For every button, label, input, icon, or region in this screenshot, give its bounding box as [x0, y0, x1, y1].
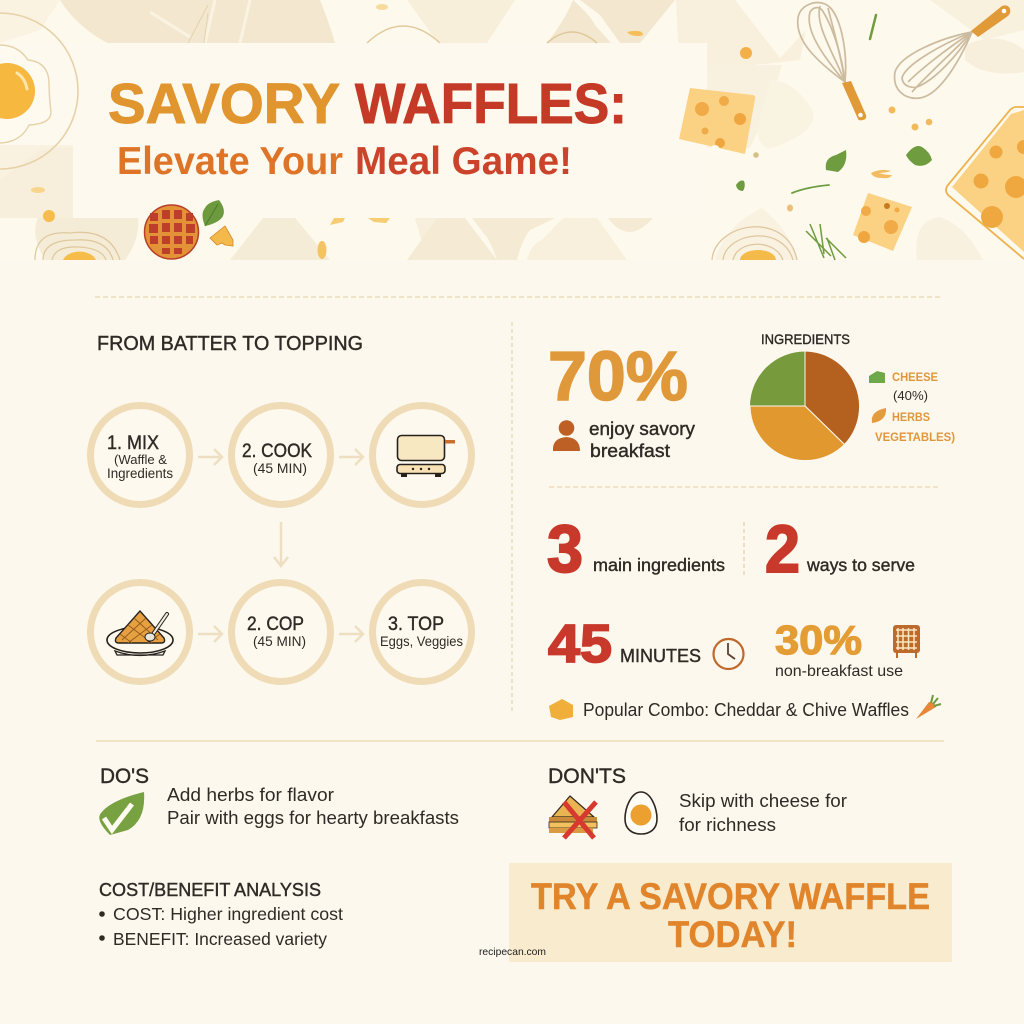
stat: 2 ways to serve	[765, 512, 915, 587]
icon: waffle grid	[893, 625, 920, 658]
stat: 45 minutes: MINUTES	[620, 646, 701, 666]
arrow: down	[274, 522, 288, 566]
pie legend: (40%)	[893, 389, 928, 403]
icon: whisk vertical	[798, 3, 866, 120]
step 1: mix: (Waffle &	[114, 452, 167, 467]
arrow: cop to top	[339, 626, 363, 642]
step 2: cook: (45 MIN)	[253, 461, 307, 476]
subtitle: Elevate Your	[117, 140, 343, 183]
step 2: cop: (45 MIN)	[253, 634, 306, 649]
step 3: top	[372, 582, 472, 682]
stat: 3 main ingredients: 3	[547, 512, 583, 587]
stat: 30 percent	[775, 617, 920, 680]
icon: green cheese	[869, 371, 885, 383]
step 2: cook	[232, 406, 330, 504]
popular combo: Popular Combo: Cheddar & Chive Waffles	[583, 700, 909, 720]
panel: don'ts	[548, 765, 847, 838]
arrow: plate to cop	[198, 626, 222, 642]
icon: person	[553, 420, 580, 451]
icon: whisk horizontal	[895, 5, 1010, 98]
stat: 3 main ingredients: main ingredients	[593, 555, 725, 575]
icon: large cheese slice	[946, 107, 1024, 259]
top divider	[95, 296, 942, 298]
step 1: mix: 1. MIX	[107, 433, 159, 454]
title	[108, 72, 627, 136]
stat: 30 percent: non-breakfast use	[775, 663, 903, 680]
pie legend: VEGETABLES)	[875, 430, 955, 444]
step 1: mix: Ingredients	[107, 466, 173, 481]
step icon: plated waffle	[90, 582, 190, 682]
icon: cheese block left	[679, 88, 755, 155]
icon: crossed sandwich	[549, 796, 597, 838]
source credit: recipecan.com	[479, 946, 546, 958]
stat: 45 minutes	[548, 614, 744, 674]
subtitle	[117, 140, 572, 183]
short divider	[743, 522, 745, 578]
icon: egg	[625, 792, 657, 834]
panel: cost/benefit analysis: COST/BENEFIT ANALYSIS	[99, 880, 321, 900]
pie legend: CHEESE	[892, 370, 938, 384]
panel: do's: Add herbs for flavor	[167, 785, 334, 805]
main divider	[96, 740, 944, 742]
title: SAVORY	[108, 72, 340, 136]
icon: clock	[714, 639, 744, 669]
stat: 30 percent: 30%	[775, 617, 862, 663]
icon: cheese wedge	[549, 699, 573, 720]
arrow: mix to cook	[198, 449, 222, 465]
icon: bottom-right egg rings	[712, 227, 797, 260]
process heading: FROM BATTER TO TOPPING	[97, 333, 363, 355]
stat: 70 percent: breakfast	[590, 441, 670, 461]
stat: 2 ways to serve: 2	[765, 512, 800, 587]
pie chart: ingredients: INGREDIENTS	[761, 331, 850, 347]
subtitle: Meal Game!	[355, 140, 572, 183]
arrow: cook to iron	[339, 449, 363, 465]
right column divider	[549, 486, 938, 488]
icon: check leaf	[99, 792, 144, 835]
column divider	[511, 322, 513, 714]
panel: don'ts: Skip with cheese for	[679, 791, 847, 811]
stat: 70 percent: enjoy savory	[589, 419, 695, 439]
step 2: cop: 2. COP	[247, 614, 304, 635]
stat: 45 minutes: 45	[548, 614, 612, 674]
panel: do's: Pair with eggs for hearty breakfasts	[167, 808, 459, 828]
stat: 70 percent: 70%	[548, 337, 688, 415]
panel: cost/benefit analysis	[99, 880, 343, 949]
stat: 3 main ingredients	[547, 512, 725, 587]
step 3: top: 3. TOP	[388, 614, 444, 635]
step 2: cop	[232, 582, 330, 682]
step 3: top: Eggs, Veggies	[380, 634, 463, 649]
icon: fried egg on plate	[0, 13, 78, 169]
icon: round waffle	[144, 205, 198, 259]
icon: scattered egg drops	[31, 187, 390, 259]
header banner background	[0, 0, 1024, 260]
panel: don'ts: for richness	[679, 815, 776, 835]
process flow	[90, 406, 472, 682]
panel: don'ts: DON'TS	[548, 765, 626, 788]
panel: do's: DO'S	[100, 765, 149, 788]
call to action: TODAY!	[668, 914, 797, 955]
icon: herb leaf and cheese wedge	[202, 200, 233, 246]
pie legend	[869, 370, 955, 444]
icon: carrot	[916, 695, 941, 719]
icon: orange leaf	[872, 408, 886, 423]
icon: cheese block lower	[853, 193, 912, 251]
pie chart: ingredients	[750, 331, 860, 461]
title: WAFFLES:	[355, 72, 627, 136]
icon: herbs and crumbs	[736, 15, 932, 260]
icon: bottom-left egg rings	[35, 232, 120, 260]
panel: cost/benefit analysis: COST: Higher ingredient cost	[113, 904, 343, 924]
pie legend: HERBS	[892, 410, 930, 424]
call to action	[509, 863, 952, 962]
panel: cost/benefit analysis: BENEFIT: Increased variety	[113, 929, 327, 949]
call to action: TRY A SAVORY WAFFLE	[531, 876, 930, 917]
step 2: cook: 2. COOK	[242, 441, 312, 462]
stat: 2 ways to serve: ways to serve	[806, 555, 915, 575]
popular combo	[549, 695, 941, 720]
step 1: mix	[90, 406, 190, 504]
stat: 70 percent	[548, 337, 695, 461]
step icon: waffle iron	[372, 406, 472, 504]
panel: do's	[99, 765, 459, 835]
